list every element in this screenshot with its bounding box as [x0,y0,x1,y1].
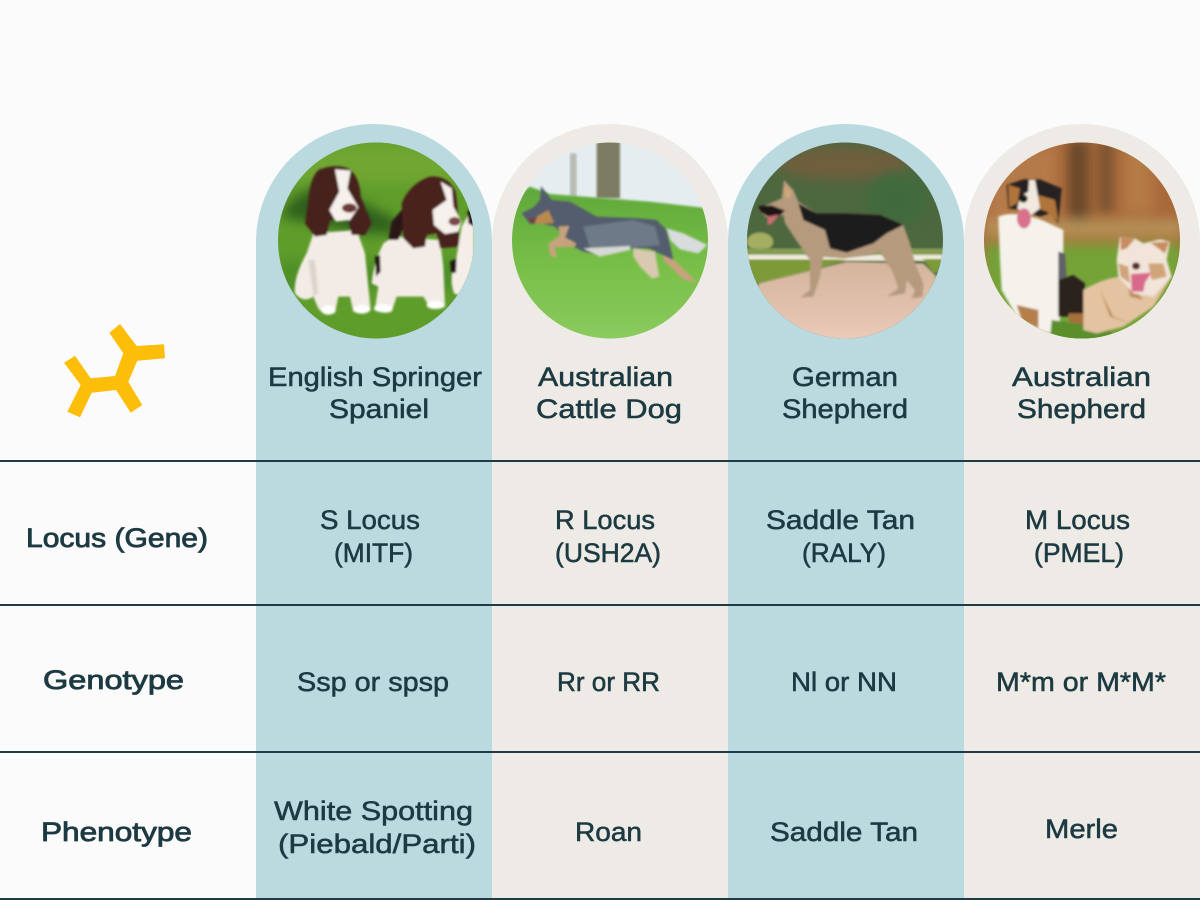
breed: German Shepherd: German [792,362,898,392]
cell: R Locus (USH2A): (USH2A) [555,538,661,568]
cell: Merle: Merle [1045,814,1118,844]
row label: Locus (Gene): Locus (Gene) [26,523,208,553]
row label: Phenotype: Phenotype [41,817,192,847]
cell: R Locus (USH2A): R Locus [555,505,655,535]
breed: Australian Cattle Dog [536,362,682,424]
cell: Saddle Tan: Saddle Tan [770,817,918,847]
breed: English Springer Spaniel: English Springer [268,362,482,392]
cell: R Locus (USH2A) [555,505,661,568]
cell: Roan: Roan [575,817,642,847]
cell: M*m or M*M*: M*m or M*M* [996,667,1167,697]
column: Australian Cattle Dog [492,124,728,898]
breed: Australian Shepherd [1012,362,1151,424]
photo: australian shepherds [980,140,1187,343]
icon: yellow balloon-dog logo [64,324,165,417]
row: Locus (Gene) [26,505,1130,568]
cell: Ssp or spsp: Ssp or spsp [297,667,449,697]
cell: Rr or RR: Rr or RR [557,667,660,697]
breed: German Shepherd: Shepherd [782,394,908,424]
cell: Saddle Tan (RALY): Saddle Tan [766,505,915,535]
heading: breed names [268,362,1151,424]
breed: Australian Cattle Dog: Cattle Dog [536,394,682,424]
cell: White Spotting (Piebald/Parti): White Spotting [274,796,473,826]
cell: White Spotting (Piebald/Parti) [274,796,476,859]
row: Genotype [43,665,1167,697]
column: German Shepherd [728,124,964,898]
breed: English Springer Spaniel: Spaniel [329,394,429,424]
cell: Nl or NN: Nl or NN [791,667,897,697]
column: English Springer Spaniel [256,124,492,898]
breed: English Springer Spaniel [268,362,482,424]
cell: S Locus (MITF): (MITF) [334,538,413,568]
cell: S Locus (MITF) [320,505,420,568]
row label: Genotype: Genotype [43,665,184,695]
cell: M Locus (PMEL): M Locus [1025,505,1130,535]
cell: Saddle Tan (RALY) [766,505,915,568]
cell: M Locus (PMEL): (PMEL) [1034,538,1124,568]
cell: White Spotting (Piebald/Parti): (Piebald/Parti) [278,829,476,859]
breed: Australian Shepherd: Australian [1012,362,1151,392]
photo: cattle dog leaping [507,140,713,343]
cell: Saddle Tan (RALY): (RALY) [802,538,886,568]
photo: german shepherd on a path [743,140,947,343]
cell: M Locus (PMEL) [1025,505,1130,568]
breed: German Shepherd [782,362,908,424]
breed: Australian Shepherd: Shepherd [1017,394,1146,424]
cell: S Locus (MITF): S Locus [320,505,420,535]
photo: springer spaniel puppies [277,140,480,340]
breed: Australian Cattle Dog: Australian [538,362,673,392]
row: Phenotype [41,796,1118,859]
column: Australian Shepherd [964,124,1200,898]
